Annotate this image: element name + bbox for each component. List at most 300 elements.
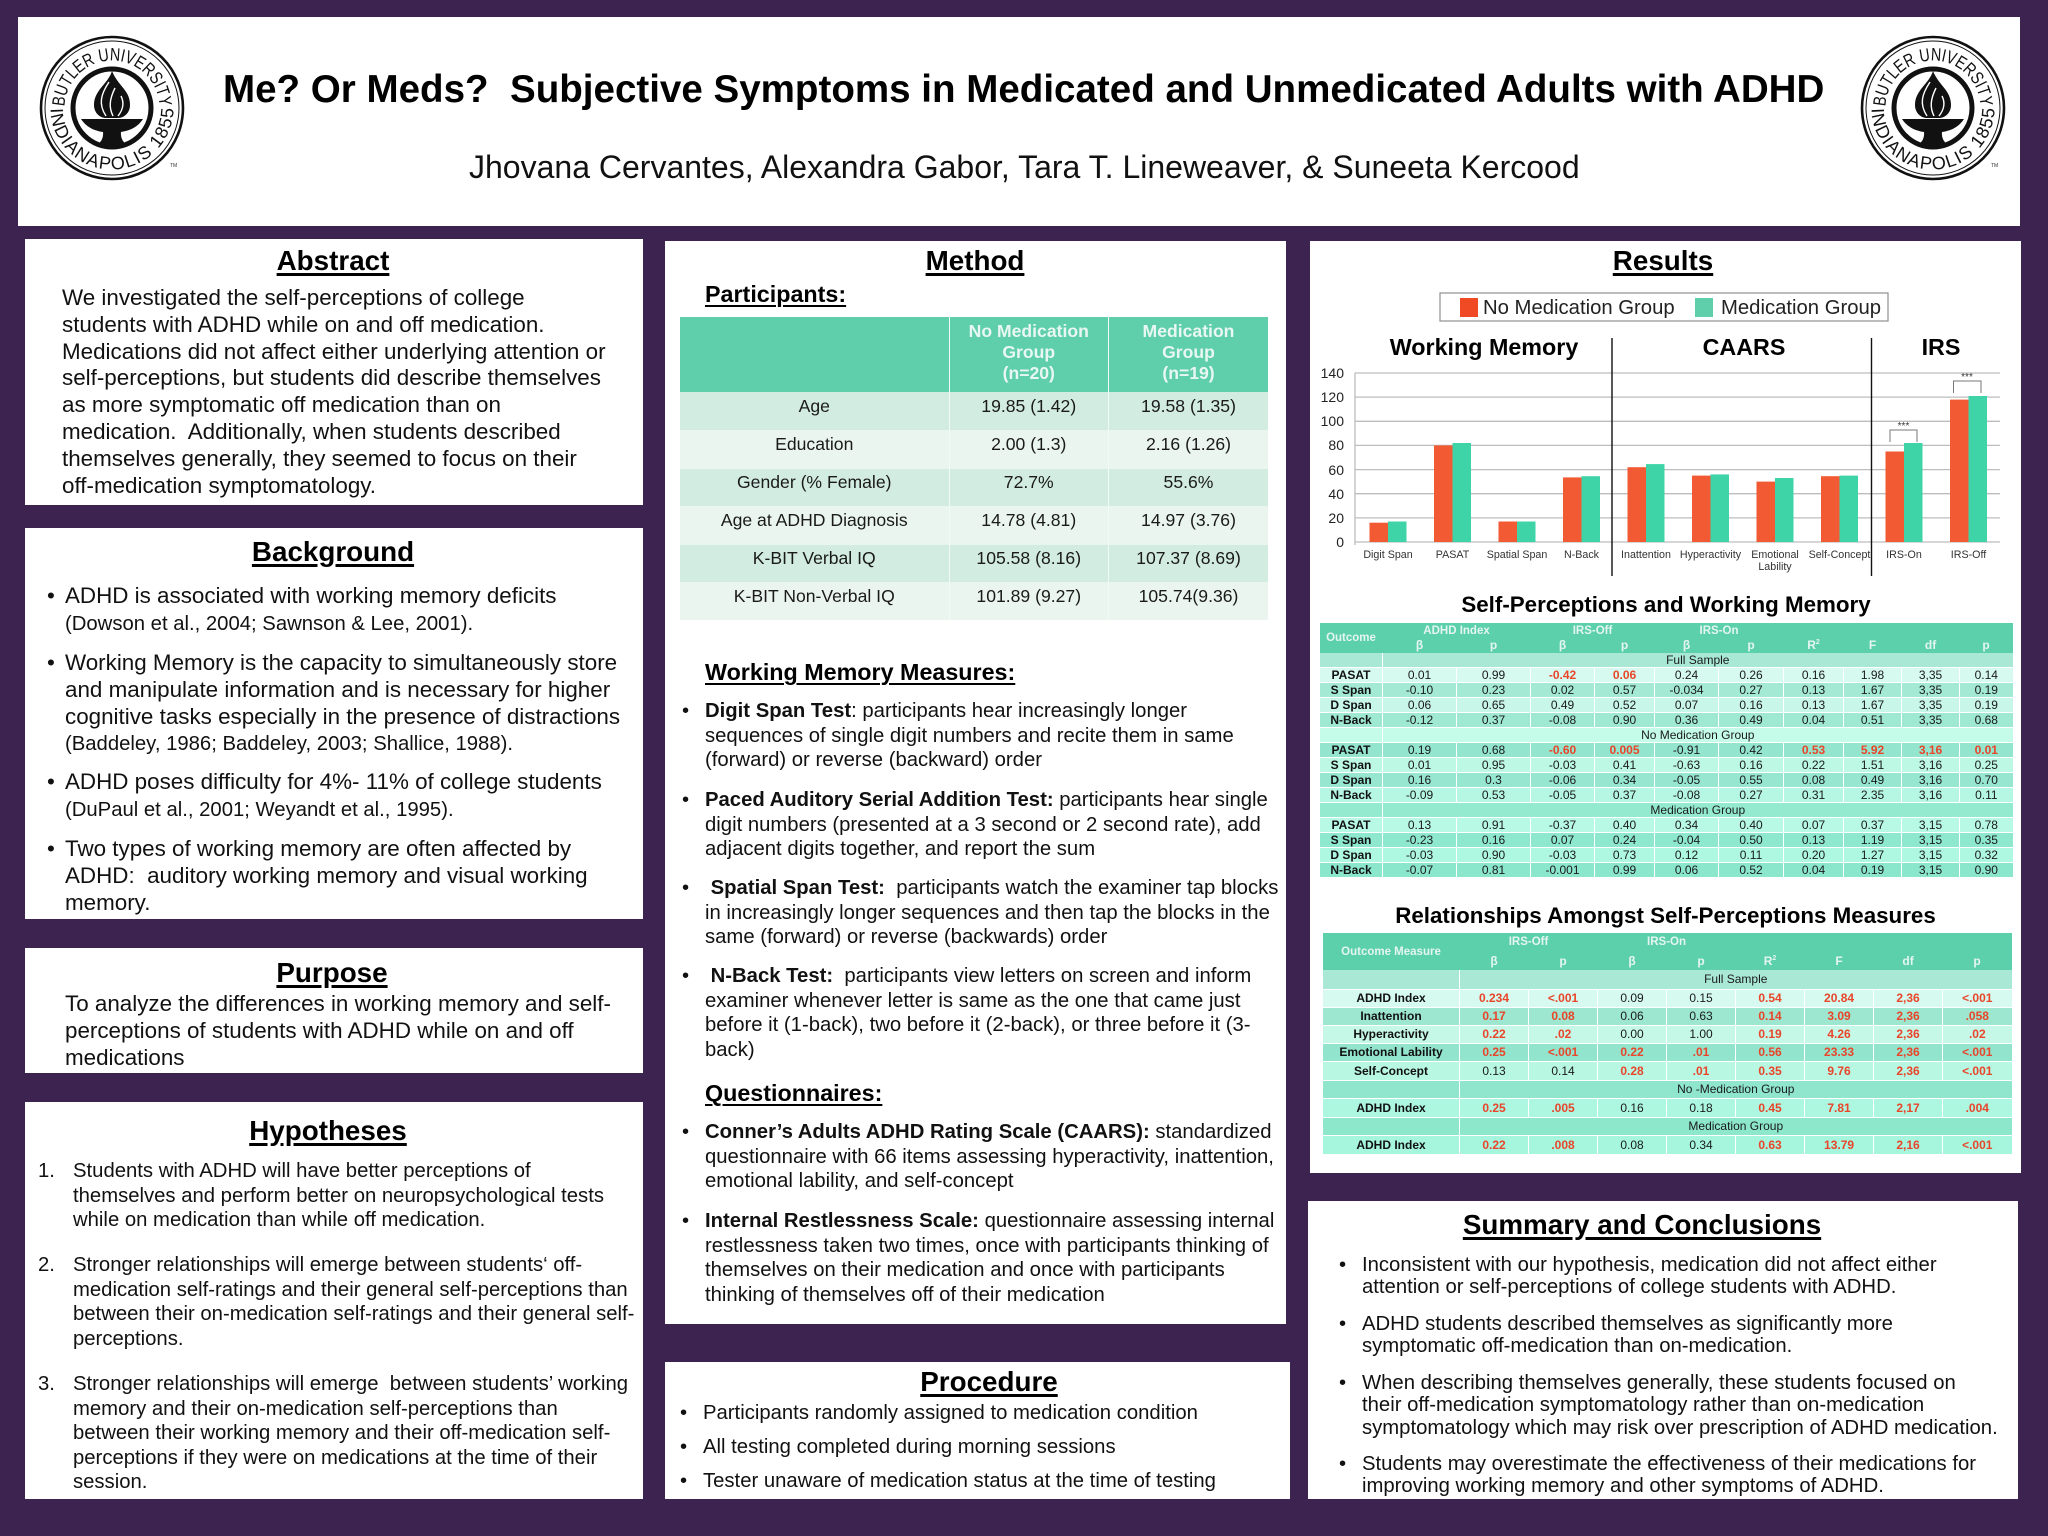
table: self-perceptions and working memory: -0.91 [1673, 743, 1700, 757]
table: relationships amongst self-perceptions: 0.45 [1758, 1100, 1782, 1114]
category labels: Inattention [1621, 549, 1671, 561]
table: relationships amongst self-perceptions: Full Sample [1704, 972, 1767, 986]
table: self-perceptions and working memory: 5.92 [1861, 743, 1884, 757]
table: relationships amongst self-perceptions: .02 [1969, 1027, 1986, 1041]
table: relationships amongst self-perceptions: p [1973, 954, 1981, 968]
bullet: two types: Two types of working memory are often affected by ADHD: auditory working memory and visual working memory. [65, 836, 588, 915]
table: relationships amongst self-perceptions: .005 [1551, 1100, 1575, 1114]
table: self-perceptions and working memory: 0.06 [1613, 668, 1636, 682]
table: relationships amongst self-perceptions: 0.22 [1482, 1027, 1506, 1041]
icon: Butler University seal right [1860, 36, 2006, 180]
table: self-perceptions and working memory: No Medication Group [1641, 728, 1754, 742]
table: self-perceptions and working memory: 0.23 [1482, 683, 1505, 697]
bullet: spatial span: Spatial Span Test: participants watch the examiner tap blocks in increasingly longer sequences and then tap the blocks in the same (forward) or reverse (backwards) order [705, 877, 1278, 948]
table: relationships amongst self-perceptions: 2,36 [1896, 1009, 1920, 1023]
table: self-perceptions and working memory: 0.13 [1408, 818, 1431, 832]
table: self-perceptions and working memory: 0.37 [1861, 818, 1884, 832]
significance brackets [1890, 381, 1981, 442]
table: self-perceptions and working memory: 0.11 [1740, 848, 1762, 862]
table: self-perceptions and working memory: 0.57 [1613, 683, 1636, 697]
table: self-perceptions and working memory: -0.04 [1673, 833, 1700, 847]
table: self-perceptions and working memory: 0.27 [1739, 788, 1763, 802]
bars: no medication group [1370, 400, 1968, 542]
table: relationships amongst self-perceptions: 13.79 [1824, 1138, 1854, 1152]
table: participants: 55.6% [1164, 472, 1213, 492]
table: self-perceptions and working memory: 0.13 [1802, 683, 1825, 697]
section dividers [1612, 338, 1872, 576]
table: participants: 2.00 (1.3) [991, 434, 1066, 454]
table: self-perceptions and working memory: 0.35 [1975, 833, 1998, 847]
table: relationships amongst self-perceptions: 0.28 [1620, 1064, 1644, 1078]
table: self-perceptions and working memory: -0.60 [1549, 743, 1576, 757]
table: participants: 19.85 (1.42) [981, 396, 1076, 416]
text: • [680, 1402, 687, 1424]
table: relationships amongst self-perceptions: 0.35 [1758, 1064, 1782, 1078]
table: self-perceptions and working memory: 0.95 [1482, 758, 1505, 772]
table: self-perceptions and working memory: -0.001 [1546, 863, 1580, 877]
bars: medication group [1388, 396, 1987, 542]
table: self-perceptions and working memory: IRS-Off [1573, 624, 1612, 636]
table: relationships amongst self-perceptions: 0.16 [1620, 1100, 1644, 1114]
table: self-perceptions and working memory: 0.91 [1482, 818, 1505, 832]
text: • [682, 1210, 689, 1232]
chart section titles: Working Memory [1390, 334, 1578, 360]
table: self-perceptions and working memory: 3,15 [1919, 818, 1942, 832]
table: self-perceptions and working memory: 0.19 [1975, 683, 1998, 697]
table: self-perceptions and working memory: 0.90 [1613, 713, 1636, 727]
table: self-perceptions and working memory: 0.68 [1482, 743, 1505, 757]
table: relationships amongst self-perceptions [1323, 933, 2012, 1154]
table: self-perceptions and working memory: 0.16 [1802, 668, 1825, 682]
table: relationships amongst self-perceptions: 0.13 [1482, 1064, 1506, 1078]
chart section titles: CAARS [1703, 334, 1785, 360]
heading: self-perceptions and working memory: Self-Perceptions and Working Memory [1461, 592, 1871, 617]
table: participants: (n=20) [1003, 363, 1055, 383]
bullet: prevalence: ADHD poses difficulty for 4%- 11% of college students (DuPaul et al., 2001; Weyandt et al., 1995). [65, 769, 602, 821]
table: relationships amongst self-perceptions: 2,16 [1896, 1138, 1920, 1152]
table: relationships amongst self-perceptions: p [1697, 954, 1705, 968]
text: • [682, 700, 689, 722]
table: relationships amongst self-perceptions: 0.63 [1689, 1009, 1713, 1023]
table: self-perceptions and working memory: 1.51 [1861, 758, 1884, 772]
table: self-perceptions and working memory: -0.07 [1406, 863, 1433, 877]
bullet: medication no effect: Inconsistent with our hypothesis, medication did not affect either attention or self-perceptions of college students with ADHD. [1362, 1254, 1937, 1298]
table: participants: Education [775, 434, 853, 454]
table: relationships amongst self-perceptions: <.001 [1962, 1045, 1992, 1059]
bullet: CAARS: Conner’s Adults ADHD Rating Scale (CAARS): standardized questionnaire with 66 items assessing hyperactivity, inattention, emotional lability, and self-concept [705, 1121, 1274, 1192]
panel: purpose [25, 948, 643, 1073]
table: participants: K-BIT Non-Verbal IQ [734, 586, 895, 606]
category labels: N-Back [1564, 549, 1600, 561]
table: self-perceptions and working memory: -0.23 [1406, 833, 1433, 847]
table: relationships amongst self-perceptions: 0.14 [1551, 1064, 1575, 1078]
table: relationships amongst self-perceptions: 0.08 [1620, 1138, 1644, 1152]
table: relationships amongst self-perceptions: 0.22 [1482, 1138, 1506, 1152]
table: relationships amongst self-perceptions: .02 [1555, 1027, 1571, 1041]
text: • [1339, 1453, 1346, 1475]
table: participants [680, 317, 1268, 620]
table: relationships amongst self-perceptions: 4.26 [1827, 1027, 1851, 1041]
table: self-perceptions and working memory: 0.06 [1675, 863, 1698, 877]
table: relationships amongst self-perceptions: ADHD Index [1356, 991, 1426, 1005]
icon: Butler University seal right: TM [1991, 163, 1998, 169]
panel: procedure [665, 1362, 1290, 1499]
table: relationships amongst self-perceptions: β [1628, 954, 1636, 968]
table: self-perceptions and working memory: p [1747, 638, 1755, 652]
table: self-perceptions and working memory: 0.40 [1739, 818, 1763, 832]
table: self-perceptions and working memory: -0.37 [1549, 818, 1576, 832]
table: self-perceptions and working memory: 0.22 [1802, 758, 1825, 772]
table: self-perceptions and working memory: 0.19 [1861, 863, 1884, 877]
table: self-perceptions and working memory: 0.90 [1975, 863, 1998, 877]
table: participants: 14.78 (4.81) [981, 510, 1076, 530]
table: relationships amongst self-perceptions: .058 [1966, 1009, 1989, 1023]
table: self-perceptions and working memory: N-Back [1330, 863, 1372, 877]
table: relationships amongst self-perceptions: df [1902, 954, 1914, 968]
table: self-perceptions and working memory: 0.24 [1675, 668, 1698, 682]
bullet: n-back: N-Back Test: participants view letters on screen and inform examiner whenever letter is same as the one that came just before it (1-back), two before it (2-back), or three before it (3- back) [705, 965, 1251, 1060]
table: self-perceptions and working memory: 0.99 [1482, 668, 1505, 682]
table: relationships amongst self-perceptions: 0.18 [1689, 1100, 1713, 1114]
table: relationships amongst self-perceptions: 2,36 [1896, 1045, 1920, 1059]
table: self-perceptions and working memory: N-Back [1330, 713, 1372, 727]
chart section titles: IRS [1922, 334, 1960, 360]
table: self-perceptions and working memory: 1.67 [1861, 683, 1884, 697]
table: relationships amongst self-perceptions: <.001 [1962, 1138, 1992, 1152]
text: purpose body: To analyze the differences in working memory and self- perceptions of students with ADHD while on and off medications [65, 991, 611, 1070]
table: relationships amongst self-perceptions: β [1490, 954, 1498, 968]
table: participants: Gender (% Female) [737, 472, 892, 492]
table: relationships amongst self-perceptions: Medication Group [1688, 1119, 1783, 1133]
bullet: more symptomatic off medication: ADHD students described themselves as significantly more symptomatic off-medication than on-medication. [1362, 1313, 1893, 1357]
bullet: working memory definition: Working Memory is the capacity to simultaneously store and manipulate information and is necessary for higher cognitive tasks especially in the presence of distractions (Baddeley, 1986; Baddeley, 2003; Shallice, 1988). [65, 650, 620, 755]
table: relationships amongst self-perceptions: 0.08 [1551, 1009, 1575, 1023]
table: self-perceptions and working memory: 0.04 [1802, 863, 1825, 877]
table: self-perceptions and working memory: 0.01 [1408, 668, 1431, 682]
table: self-perceptions and working memory: Medication Group [1650, 803, 1745, 817]
table: self-perceptions and working memory: Full Sample [1666, 653, 1729, 667]
text: 1. [38, 1160, 55, 1182]
table: relationships amongst self-perceptions: No -Medication Group [1677, 1082, 1794, 1096]
icon: Butler University seal left: INDIANAPOLIS 1855 [50, 108, 174, 170]
subheading: questionnaires: Questionnaires: [705, 1080, 882, 1106]
bullet: overestimate effectiveness: Students may overestimate the effectiveness of their medications for improving working memory and other symptoms of ADHD. [1362, 1453, 1976, 1497]
table: self-perceptions and working memory: 0.005 [1610, 743, 1640, 757]
table: self-perceptions and working memory: 0.78 [1975, 818, 1998, 832]
table: self-perceptions and working memory: 0.81 [1482, 863, 1505, 877]
table: self-perceptions and working memory: p [1621, 638, 1628, 652]
table: self-perceptions and working memory: 0.08 [1802, 773, 1825, 787]
table: self-perceptions and working memory: 1.19 [1861, 833, 1884, 847]
table: self-perceptions and working memory: PASAT [1332, 668, 1370, 682]
table: relationships amongst self-perceptions: 2,36 [1896, 1027, 1920, 1041]
table: self-perceptions and working memory: 0.16 [1482, 833, 1505, 847]
table: relationships amongst self-perceptions: 0.15 [1689, 991, 1713, 1005]
table: relationships amongst self-perceptions: Emotional Lability [1339, 1045, 1443, 1059]
table: self-perceptions and working memory: 0.19 [1975, 698, 1998, 712]
panel: method [665, 241, 1286, 1324]
table: self-perceptions and working memory: 3,35 [1919, 713, 1942, 727]
table: relationships amongst self-perceptions: 2,36 [1896, 1064, 1920, 1078]
heading: method: Method [926, 245, 1024, 276]
y axis labels: 60 [1328, 462, 1344, 478]
significance stars [1898, 372, 1973, 432]
table: self-perceptions and working memory: 0.52 [1739, 863, 1763, 877]
subheading: working memory measures: Working Memory Measures: [705, 659, 1015, 685]
table: self-perceptions and working memory: -0.05 [1673, 773, 1700, 787]
table: self-perceptions and working memory: -0.63 [1673, 758, 1700, 772]
table: self-perceptions and working memory: -0.03 [1406, 848, 1433, 862]
table: relationships amongst self-perceptions: 0.25 [1482, 1045, 1506, 1059]
table: self-perceptions and working memory: -0.03 [1549, 848, 1576, 862]
text: • [47, 583, 55, 608]
category labels: Emotional [1751, 549, 1799, 561]
table: self-perceptions and working memory: 3,16 [1919, 773, 1942, 787]
text: • [1339, 1313, 1346, 1335]
hypothesis 1: Students with ADHD will have better perceptions of themselves and perform better on neuropsychological tests while on medication than while off medication. [73, 1160, 604, 1231]
table: self-perceptions and working memory: 0.51 [1861, 713, 1884, 727]
table: self-perceptions and working memory: 0.3 [1485, 773, 1502, 787]
table: relationships amongst self-perceptions: 0.19 [1758, 1027, 1782, 1041]
table: self-perceptions and working memory: 3,35 [1919, 668, 1942, 682]
heading: hypotheses: Hypotheses [249, 1115, 407, 1146]
table: self-perceptions and working memory: 3,15 [1919, 863, 1942, 877]
table: relationships amongst self-perceptions: R2 [1764, 954, 1776, 968]
table: relationships amongst self-perceptions: 23.33 [1824, 1045, 1854, 1059]
table: relationships amongst self-perceptions: IRS-On [1647, 936, 1686, 948]
table: relationships amongst self-perceptions: IRS-Off [1509, 936, 1548, 948]
table: relationships amongst self-perceptions: 1.00 [1689, 1027, 1713, 1041]
table: self-perceptions and working memory: 0.14 [1975, 668, 1998, 682]
table: participants: Group [1162, 342, 1215, 362]
table: self-perceptions and working memory: 3,15 [1919, 848, 1942, 862]
bullet: working memory deficits: ADHD is associated with working memory deficits (Dowson et al., 2004; Sawnson & Lee, 2001). [65, 583, 557, 635]
y axis labels [1321, 365, 1344, 550]
icon: Butler University seal left [40, 36, 184, 180]
table: self-perceptions and working memory: 0.52 [1613, 698, 1636, 712]
table: self-perceptions and working memory: 3,35 [1919, 683, 1942, 697]
table: relationships amongst self-perceptions: 0.54 [1758, 991, 1782, 1005]
table: self-perceptions and working memory: 0.36 [1675, 713, 1698, 727]
table: self-perceptions and working memory: β [1559, 638, 1566, 652]
panel: hypotheses [25, 1102, 643, 1499]
table: participants: Medication [1143, 321, 1234, 341]
table: participants: Age [799, 396, 830, 416]
text: 3. [38, 1373, 55, 1395]
table: participants: No Medication [969, 321, 1089, 341]
table: self-perceptions and working memory: -0.03 [1549, 758, 1576, 772]
text: • [47, 769, 55, 794]
table: self-perceptions and working memory: -0.09 [1406, 788, 1433, 802]
category labels: Hyperactivity [1680, 549, 1742, 561]
panel: summary and conclusions [1308, 1201, 2018, 1499]
title: Me? Or Meds? Subjective Symptoms in Medicated and Unmedicated Adults with ADHD [223, 68, 1824, 111]
table: participants: Age at ADHD Diagnosis [721, 510, 908, 530]
y axis labels: 40 [1328, 486, 1344, 502]
table: relationships amongst self-perceptions: 0.34 [1689, 1138, 1713, 1152]
legend: Medication Group [1721, 297, 1881, 319]
table: participants: 14.97 (3.76) [1141, 510, 1236, 530]
table: participants: 101.89 (9.27) [976, 586, 1081, 606]
table: self-perceptions and working memory: 0.34 [1613, 773, 1636, 787]
table: self-perceptions and working memory: 0.34 [1675, 818, 1698, 832]
icon: Butler University seal left: BUTLER UNIVERSITY [52, 48, 172, 106]
table: self-perceptions and working memory: 0.37 [1482, 713, 1505, 727]
table: self-perceptions and working memory: 1.67 [1861, 698, 1884, 712]
panel: abstract [25, 239, 643, 505]
table: self-perceptions and working memory [1320, 623, 2013, 877]
table: self-perceptions and working memory: 3,16 [1919, 743, 1942, 757]
text: abstract body: We investigated the self-perceptions of college students with ADHD while on and off medication. Medications did not affect either underlying attention or self-perceptions, but students did describe themselves as more symptomatic off medication than on medication. Additionally, when students described themselves generally, they seemed to focus on their off-medication symptomatology. [62, 285, 606, 498]
table: self-perceptions and working memory: 0.13 [1802, 833, 1825, 847]
category labels: Self-Concept [1809, 549, 1870, 561]
table: self-perceptions and working memory: 0.73 [1613, 848, 1636, 862]
text: • [682, 789, 689, 811]
table: self-perceptions and working memory: 0.02 [1551, 683, 1574, 697]
bullet: digit span: Digit Span Test: participants hear increasingly longer sequences of single digit numbers and recite them in same (forward) or reverse (backward) order [705, 700, 1234, 771]
table: relationships amongst self-perceptions: 0.63 [1758, 1138, 1782, 1152]
text: 2. [38, 1254, 55, 1276]
chart: grouped bar chart [1321, 292, 2000, 576]
table: relationships amongst self-perceptions: ADHD Index [1356, 1100, 1426, 1114]
category labels: IRS-On [1886, 549, 1922, 561]
table: participants: 105.74(9.36) [1139, 586, 1238, 606]
table: self-perceptions and working memory: 0.01 [1408, 758, 1431, 772]
table: self-perceptions and working memory: 1.98 [1861, 668, 1884, 682]
text: • [680, 1470, 687, 1492]
table: relationships amongst self-perceptions: <.001 [1962, 1064, 1992, 1078]
table: self-perceptions and working memory: -0.12 [1406, 713, 1433, 727]
table: participants: 72.7% [1004, 472, 1054, 492]
table: self-perceptions and working memory: 0.50 [1739, 833, 1763, 847]
text: • [1339, 1254, 1346, 1276]
table: relationships amongst self-perceptions: Hyperactivity [1353, 1027, 1429, 1041]
table: self-perceptions and working memory: PASAT [1332, 818, 1370, 832]
heading: summary and conclusions: Summary and Conclusions [1463, 1209, 1821, 1240]
table: self-perceptions and working memory: 0.37 [1613, 788, 1636, 802]
text: • [47, 650, 55, 675]
table: relationships amongst self-perceptions: 0.22 [1620, 1045, 1644, 1059]
table: self-perceptions and working memory: 0.53 [1802, 743, 1825, 757]
heading: results: Results [1613, 245, 1713, 276]
table: self-perceptions and working memory: 0.49 [1551, 698, 1574, 712]
text: • [682, 877, 689, 899]
table: self-perceptions and working memory: 0.13 [1802, 698, 1825, 712]
table: relationships amongst self-perceptions: 0.09 [1620, 991, 1644, 1005]
table: relationships amongst self-perceptions: Self-Concept [1354, 1064, 1428, 1078]
table: self-perceptions and working memory: 3,16 [1919, 788, 1942, 802]
table: self-perceptions and working memory: S Span [1331, 833, 1371, 847]
bullet: PASAT: Paced Auditory Serial Addition Test: participants hear single digit numbers (presented at a 3 second or 2 second rate), add adjacent digits together, and report the sum [705, 789, 1268, 860]
icon: Butler University seal left: TM [170, 163, 177, 169]
table: self-perceptions and working memory: ADHD Index [1423, 624, 1490, 636]
table: self-perceptions and working memory: 0.42 [1739, 743, 1763, 757]
table: relationships amongst self-perceptions: 0.25 [1482, 1100, 1506, 1114]
table: self-perceptions and working memory: 0.16 [1739, 698, 1763, 712]
category labels [1363, 549, 1986, 573]
table: self-perceptions and working memory: 3,16 [1919, 758, 1942, 772]
table: relationships amongst self-perceptions: .004 [1966, 1100, 1989, 1114]
table: relationships amongst self-perceptions: .01 [1693, 1064, 1709, 1078]
table: self-perceptions and working memory: 1.27 [1861, 848, 1884, 862]
heading: background: Background [252, 536, 414, 567]
category labels: Lability [1758, 561, 1792, 573]
hypothesis 2: Stronger relationships will emerge between students‘ off- medication self-ratings and their general self-perceptions than between their on-medication self-ratings and their general self- perceptions. [73, 1254, 634, 1350]
category labels: Spatial Span [1487, 549, 1547, 561]
table: relationships amongst self-perceptions: p [1559, 954, 1567, 968]
heading: purpose: Purpose [276, 957, 388, 988]
table: relationships amongst self-perceptions: .01 [1693, 1045, 1709, 1059]
authors: Jhovana Cervantes, Alexandra Gabor, Tara T. Lineweaver, & Suneeta Kercood [469, 149, 1580, 185]
bullet: tester unaware: Tester unaware of medication status at the time of testing [703, 1470, 1216, 1492]
bullet: generalized self description: When describing themselves generally, these students focused on their off-medication symptomatology rather than on-medication symptomatology which may risk over prescription of ADHD medication. [1362, 1372, 1998, 1439]
table: self-perceptions and working memory: 0.19 [1408, 743, 1431, 757]
table: participants: Group [1002, 342, 1055, 362]
table: self-perceptions and working memory: D Span [1330, 698, 1372, 712]
table: relationships amongst self-perceptions: F [1835, 954, 1843, 968]
table: relationships amongst self-perceptions: <.001 [1962, 991, 1992, 1005]
subheading: participants: Participants: [705, 281, 846, 307]
icon: Butler University seal right: INDIANAPOLIS 1855 [1872, 108, 1994, 170]
table: self-perceptions and working memory: F [1869, 638, 1876, 652]
category labels: PASAT [1436, 549, 1470, 561]
bullet: IRS: Internal Restlessness Scale: questionnaire assessing internal restlessness taken two times, once with participants thinking of themselves on their medication and once with participants thinking of themselves off of their medication [705, 1210, 1274, 1306]
category labels: IRS-Off [1951, 549, 1986, 561]
table: self-perceptions and working memory: 0.41 [1613, 758, 1636, 772]
table: self-perceptions and working memory: 0.32 [1975, 848, 1998, 862]
table: self-perceptions and working memory: 0.49 [1739, 713, 1763, 727]
heading: procedure: Procedure [920, 1366, 1058, 1397]
table: relationships amongst self-perceptions: 3.09 [1827, 1009, 1851, 1023]
table: self-perceptions and working memory: 2.35 [1861, 788, 1884, 802]
table: self-perceptions and working memory: 3,35 [1919, 698, 1942, 712]
table: relationships amongst self-perceptions: 2,36 [1896, 991, 1920, 1005]
table: self-perceptions and working memory: -0.06 [1549, 773, 1576, 787]
table: self-perceptions and working memory: 0.06 [1408, 698, 1431, 712]
table: self-perceptions and working memory: 0.53 [1482, 788, 1505, 802]
table: self-perceptions and working memory: 0.55 [1739, 773, 1763, 787]
table: relationships amongst self-perceptions: Inattention [1360, 1009, 1422, 1023]
text: • [47, 836, 55, 861]
table: relationships amongst self-perceptions: <.001 [1548, 991, 1578, 1005]
table: relationships amongst self-perceptions: 0.06 [1620, 1009, 1644, 1023]
table: self-perceptions and working memory: 0.27 [1739, 683, 1763, 697]
hypothesis 3: Stronger relationships will emerge between students’ working memory and their on-medication self-perceptions than between their working memory and their off-medication self- perceptions if they were on medications at the time of their session. [73, 1373, 628, 1493]
panel: header [18, 17, 2020, 226]
table: self-perceptions and working memory: D Span [1330, 773, 1372, 787]
table: self-perceptions and working memory: N-Back [1330, 788, 1372, 802]
table: relationships amongst self-perceptions: <.001 [1548, 1045, 1578, 1059]
table: self-perceptions and working memory: β [1683, 638, 1690, 652]
table: self-perceptions and working memory: 0.26 [1739, 668, 1763, 682]
y axis labels: 80 [1328, 437, 1344, 453]
table: self-perceptions and working memory: 0.07 [1675, 698, 1698, 712]
table: participants: 105.58 (8.16) [976, 548, 1081, 568]
table: self-perceptions and working memory: S Span [1331, 758, 1371, 772]
table: relationships amongst self-perceptions: 2,17 [1896, 1100, 1920, 1114]
table: self-perceptions and working memory: -0.42 [1549, 668, 1576, 682]
table: relationships amongst self-perceptions: 7.81 [1827, 1100, 1851, 1114]
y axis labels: 0 [1336, 534, 1344, 550]
table: participants: 19.58 (1.35) [1141, 396, 1236, 416]
table: participants: K-BIT Verbal IQ [753, 548, 876, 568]
table: self-perceptions and working memory: 0.20 [1802, 848, 1825, 862]
table: self-perceptions and working memory: D Span [1330, 848, 1372, 862]
table: self-perceptions and working memory: R2 [1807, 638, 1820, 652]
table: self-perceptions and working memory: 3,15 [1919, 833, 1942, 847]
table: self-perceptions and working memory: -0.034 [1670, 683, 1704, 697]
text: • [682, 965, 689, 987]
